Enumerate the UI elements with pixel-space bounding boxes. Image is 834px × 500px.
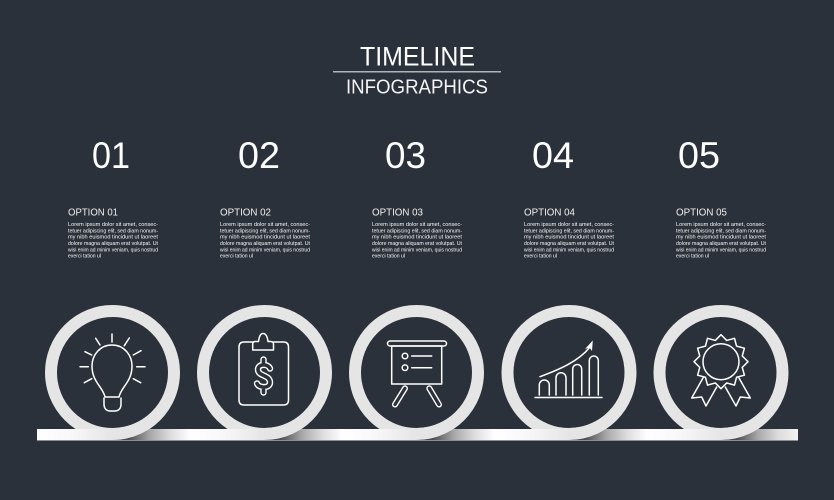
text block: option 05: wisi enim ad minim veniam, quis nostrud — [675, 247, 766, 253]
text block: option 02: Lorem ipsum dolor sit amet, consec- — [220, 222, 310, 228]
icon: presentation board — [388, 341, 446, 404]
text block: option 04 — [523, 208, 614, 260]
text block: option 05: OPTION 05 — [676, 208, 727, 218]
text block: option 04: Lorem ipsum dolor sit amet, consec- — [524, 222, 614, 228]
text block: option 04: wisi enim ad minim veniam, quis nostrud — [523, 247, 614, 253]
text block: option 05 — [675, 208, 766, 260]
number 05: 05 — [678, 135, 720, 176]
text block: option 01: Lorem ipsum dolor sit amet, consec- — [68, 222, 158, 228]
text block: option 04: exerci tation ul — [524, 254, 557, 260]
text block: option 02: tetuer adipiscing elit, sed diam nonum- — [220, 228, 310, 234]
text block: option 05: exerci tation ul — [676, 254, 709, 260]
text block: option 05: Lorem ipsum dolor sit amet, consec- — [676, 222, 766, 228]
text block: option 03: Lorem ipsum dolor sit amet, consec- — [372, 222, 462, 228]
text block: option 01: wisi enim ad minim veniam, quis nostrud — [67, 247, 158, 253]
text block: option 03: OPTION 03 — [372, 208, 423, 218]
number 02: 02 — [238, 135, 280, 176]
title: TIMELINE — [360, 42, 475, 72]
ring overlaps in front of the bar — [112, 412, 768, 434]
icon: light bulb — [80, 334, 145, 411]
text block: option 01: exerci tation ul — [68, 254, 101, 260]
rings behind the timeline bar — [51, 311, 782, 434]
text block: option 02: exerci tation ul — [220, 254, 253, 260]
text block: option 03: dolore magna aliquam erat volutpat. Ut — [372, 241, 462, 247]
icon: award ribbon — [692, 335, 750, 406]
number 04: 04 — [532, 135, 574, 176]
text block: option 01: my nibh euismod tincidunt ut laoreet — [68, 235, 158, 241]
text block: option 01: dolore magna aliquam erat volutpat. Ut — [68, 241, 158, 247]
title: INFOGRAPHICS — [346, 76, 488, 98]
text block: option 02: OPTION 02 — [220, 208, 271, 218]
text block: option 05: dolore magna aliquam erat volutpat. Ut — [676, 241, 766, 247]
text block: option 01: OPTION 01 — [68, 208, 118, 218]
text block: option 03: wisi enim ad minim veniam, quis nostrud — [371, 247, 462, 253]
icon: clipboard with dollar — [239, 334, 288, 405]
title — [333, 42, 501, 98]
text block: option 03: my nibh euismod tincidunt ut laoreet — [372, 235, 462, 241]
text block: option 02: my nibh euismod tincidunt ut laoreet — [220, 235, 310, 241]
text block: option 05: tetuer adipiscing elit, sed diam nonum- — [676, 228, 766, 234]
text block: option 05: my nibh euismod tincidunt ut laoreet — [676, 235, 766, 241]
text block: option 03: tetuer adipiscing elit, sed diam nonum- — [372, 228, 462, 234]
text block: option 04: tetuer adipiscing elit, sed diam nonum- — [524, 228, 614, 234]
icon: rising bar chart — [535, 340, 602, 398]
text block: option 03: exerci tation ul — [372, 254, 405, 260]
text block: option 01 — [67, 208, 158, 260]
number 01: 01 — [92, 135, 130, 176]
text block: option 04: dolore magna aliquam erat volutpat. Ut — [524, 241, 614, 247]
text block: option 02: dolore magna aliquam erat volutpat. Ut — [220, 241, 310, 247]
text block: option 02 — [219, 208, 310, 260]
timeline bar — [37, 429, 798, 441]
text block: option 04: OPTION 04 — [524, 208, 575, 218]
text block: option 03 — [371, 208, 462, 260]
text block: option 04: my nibh euismod tincidunt ut laoreet — [524, 235, 614, 241]
text block: option 01: tetuer adipiscing elit, sed diam nonum- — [68, 228, 158, 234]
text block: option 02: wisi enim ad minim veniam, quis nostrud — [219, 247, 310, 253]
number 03: 03 — [385, 135, 426, 176]
